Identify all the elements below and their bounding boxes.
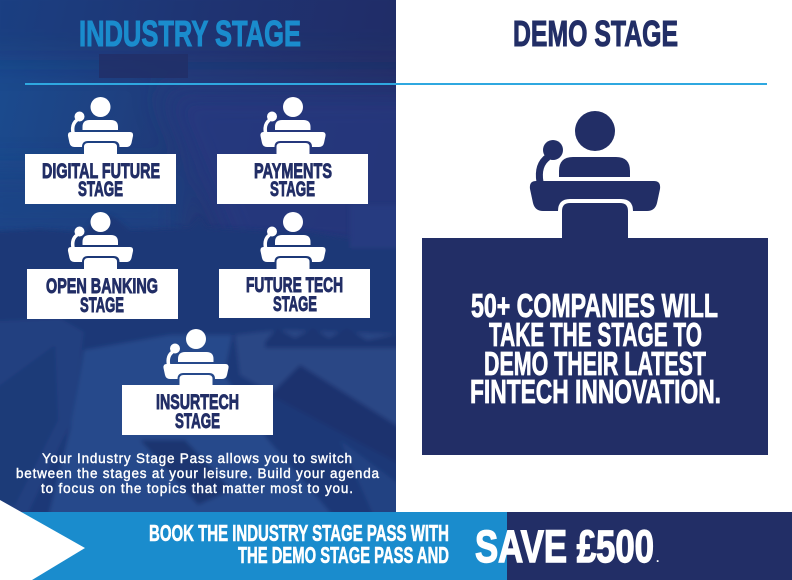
stage: digital future [25,97,176,204]
icon: large podium speaker [530,111,660,238]
stage: future tech: FUTURE TECH [246,274,343,297]
heading: demo stage: DEMO STAGE [513,13,678,54]
banner: save offer: THE DEMO STAGE PASS AND [238,542,449,568]
stage: payments: STAGE [270,178,315,201]
icon: podium speaker [68,97,133,160]
stage: insurtech [122,329,273,435]
text block: industry stage pass description: to focus on the topics that matter most to you. [41,481,353,496]
stage: future tech: STAGE [273,293,317,316]
text block: industry stage pass description: between the stages at your leisure. Build your agenda [16,466,379,481]
icon: podium speaker [260,212,326,276]
heading: industry stage: INDUSTRY STAGE [79,13,301,54]
icon: podium speaker [68,212,133,276]
stage: open banking [27,212,178,319]
stage: future tech [219,212,370,318]
panel: industry stage background [0,0,396,512]
icon: podium speaker [260,97,326,160]
stage: payments [217,97,368,204]
stage: insurtech: INSURTECH [156,391,239,414]
stage: payments: PAYMENTS [254,160,332,183]
banner: save offer: SAVE £500 [475,521,654,572]
text block: industry stage pass description [16,451,379,496]
divider line [25,83,767,85]
banner: save offer: . [656,551,659,565]
stage: digital future: STAGE [78,178,123,201]
banner: save offer: BOOK THE INDUSTRY STAGE PASS WITH [149,520,449,546]
banner: save offer [0,500,792,580]
arrow [0,500,85,580]
stage: open banking: OPEN BANKING [46,275,158,298]
panel: demo stage callout [422,238,768,455]
city photo [0,217,396,512]
text block: industry stage pass description: Your Industry Stage Pass allows you to switch [42,451,352,466]
panel: demo stage background [396,0,792,512]
stage: insurtech: STAGE [175,410,220,433]
icon: podium speaker [163,329,229,392]
stage: digital future: DIGITAL FUTURE [42,160,160,183]
stage: open banking: STAGE [80,294,124,317]
